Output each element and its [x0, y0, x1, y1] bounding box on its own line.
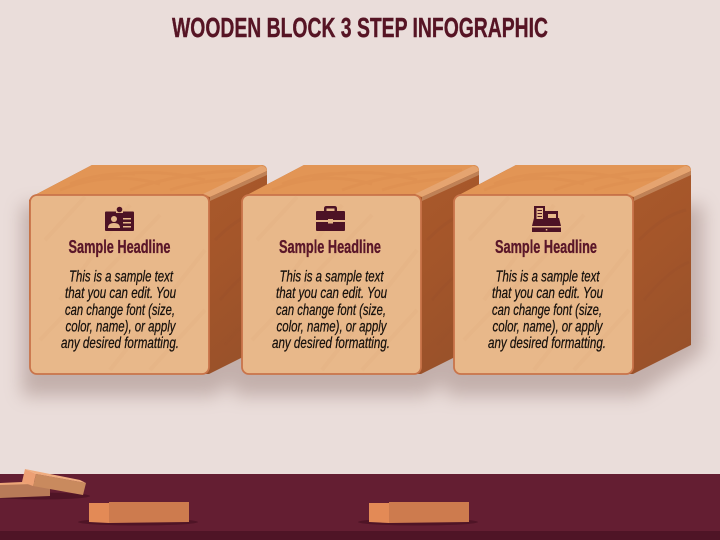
headline: Sample Headline	[279, 237, 381, 257]
body text: any desired formatting.	[272, 335, 390, 352]
body text: that you can edit. You	[65, 285, 176, 302]
body text: color, name), or apply	[492, 318, 603, 336]
block 3	[453, 165, 691, 374]
body text: This is a sample text	[496, 268, 600, 286]
title: WOODEN BLOCK 3 STEP INFOGRAPHIC	[172, 12, 548, 43]
block 1	[29, 165, 267, 374]
brick 1	[78, 502, 198, 526]
body text: can change font (size,	[276, 302, 386, 319]
block 2	[241, 165, 479, 374]
body text: can change font (size,	[65, 302, 175, 319]
block shadows	[22, 205, 703, 396]
body text: color, name), or apply	[66, 318, 176, 336]
body text: color, name), or apply	[276, 318, 387, 336]
body text	[488, 268, 606, 352]
headline: Sample Headline	[68, 237, 170, 257]
body text: This is a sample text	[280, 268, 384, 286]
icon: briefcase	[316, 206, 345, 231]
brick 2	[358, 502, 478, 526]
icon: cash register	[532, 206, 561, 232]
icon: id badge	[105, 207, 134, 231]
floor	[0, 474, 720, 540]
body text: any desired formatting.	[488, 335, 606, 352]
body text: that you can edit. You	[492, 285, 603, 302]
body text: can change font (size,	[492, 302, 602, 319]
body text: any desired formatting.	[61, 335, 179, 352]
body text	[61, 268, 179, 352]
headline: Sample Headline	[495, 237, 597, 257]
body text	[272, 268, 390, 352]
body text: This is a sample text	[69, 268, 173, 286]
brick pile left	[0, 469, 90, 500]
body text: that you can edit. You	[276, 285, 387, 302]
